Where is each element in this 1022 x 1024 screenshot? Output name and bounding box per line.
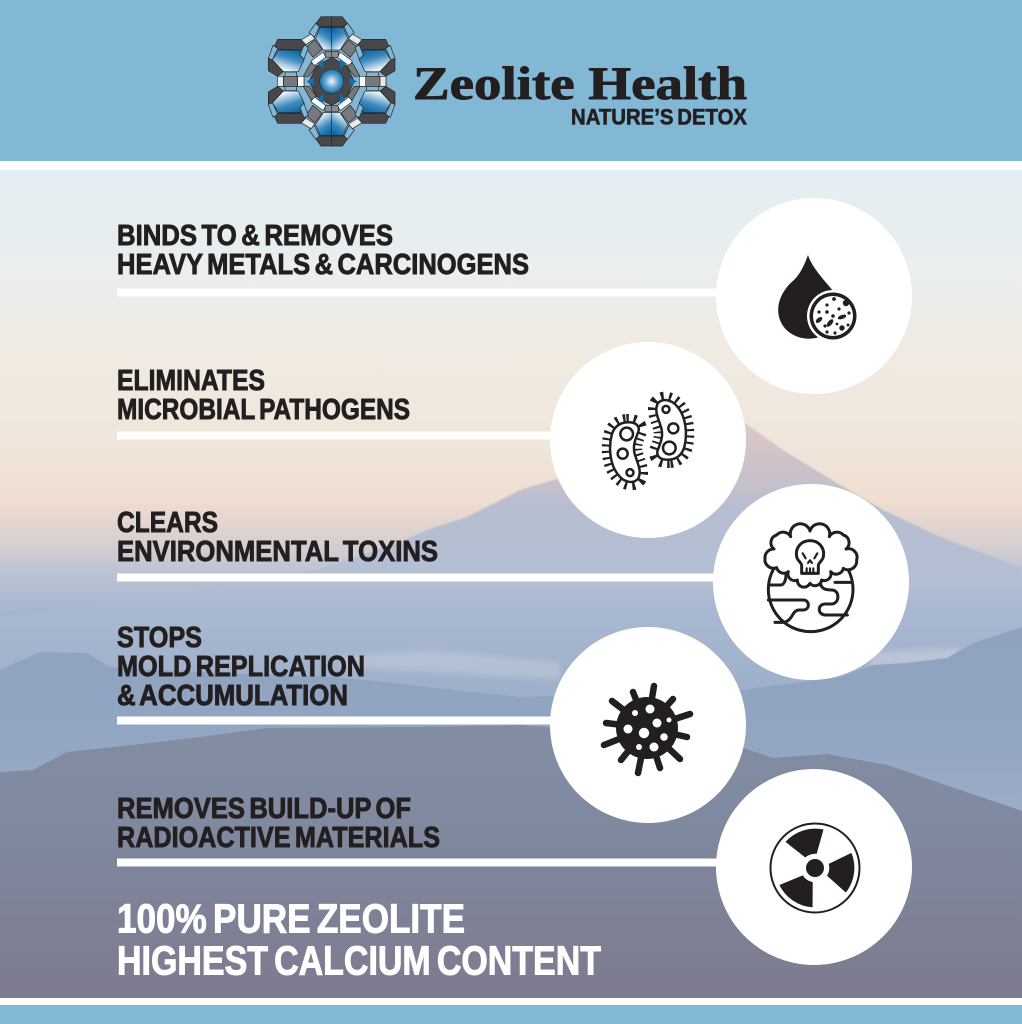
icon: mold spore: [604, 686, 690, 773]
benefit 5 circle: [716, 769, 912, 965]
benefit 4 heading: STOPS: [117, 622, 202, 654]
white rule above footer: [0, 998, 1022, 1005]
logo wordmark: NATURE’S DETOX: [571, 104, 747, 130]
benefit 4 heading: MOLD REPLICATION: [117, 651, 365, 683]
closing statement: [117, 896, 601, 984]
benefit 2 circle: [550, 342, 746, 538]
benefit 2 bar: [117, 432, 557, 440]
benefit 3 circle: [713, 484, 909, 680]
benefit 5 heading: REMOVES BUILD-UP OF: [117, 793, 411, 825]
benefit 4 heading: & ACCUMULATION: [117, 680, 348, 712]
benefit 1 heading: HEAVY METALS & CARCINOGENS: [117, 249, 529, 281]
benefit 2 heading: MICROBIAL PATHOGENS: [117, 394, 410, 426]
benefit 1 heading: [117, 220, 529, 281]
benefit 3 heading: [117, 507, 438, 568]
footer band: [0, 1005, 1022, 1024]
white rule under header: [0, 161, 1022, 170]
benefit 3 heading: ENVIRONMENTAL TOXINS: [117, 536, 438, 568]
icon: drop with particle circle: [778, 255, 859, 342]
icon: radiation symbol: [770, 824, 860, 912]
icon: bacteria: [610, 400, 686, 482]
logo wordmark: [413, 58, 747, 130]
benefit 4 bar: [117, 716, 557, 724]
closing statement: 100% PURE ZEOLITE: [117, 896, 465, 942]
benefit 3 heading: CLEARS: [117, 507, 218, 539]
benefit 1 heading: BINDS TO & REMOVES: [117, 220, 393, 252]
benefit 2 heading: [117, 365, 410, 426]
header band: [0, 0, 1022, 161]
benefit 5 heading: [117, 793, 440, 854]
logo emblem: [268, 17, 395, 146]
benefit 3 bar: [117, 574, 722, 582]
icon: polluted globe with skull cloud: [765, 524, 857, 632]
benefit 5 bar: [117, 858, 727, 866]
benefit 4 heading: [117, 622, 365, 712]
benefit 5 heading: RADIOACTIVE MATERIALS: [117, 822, 440, 854]
logo wordmark: Zeolite Health: [413, 58, 747, 110]
closing statement: HIGHEST CALCIUM CONTENT: [117, 938, 601, 984]
benefit 1 circle: [716, 198, 912, 394]
benefit 1 bar: [117, 288, 727, 296]
benefit 4 circle: [550, 627, 746, 823]
benefit 2 heading: ELIMINATES: [117, 365, 265, 397]
